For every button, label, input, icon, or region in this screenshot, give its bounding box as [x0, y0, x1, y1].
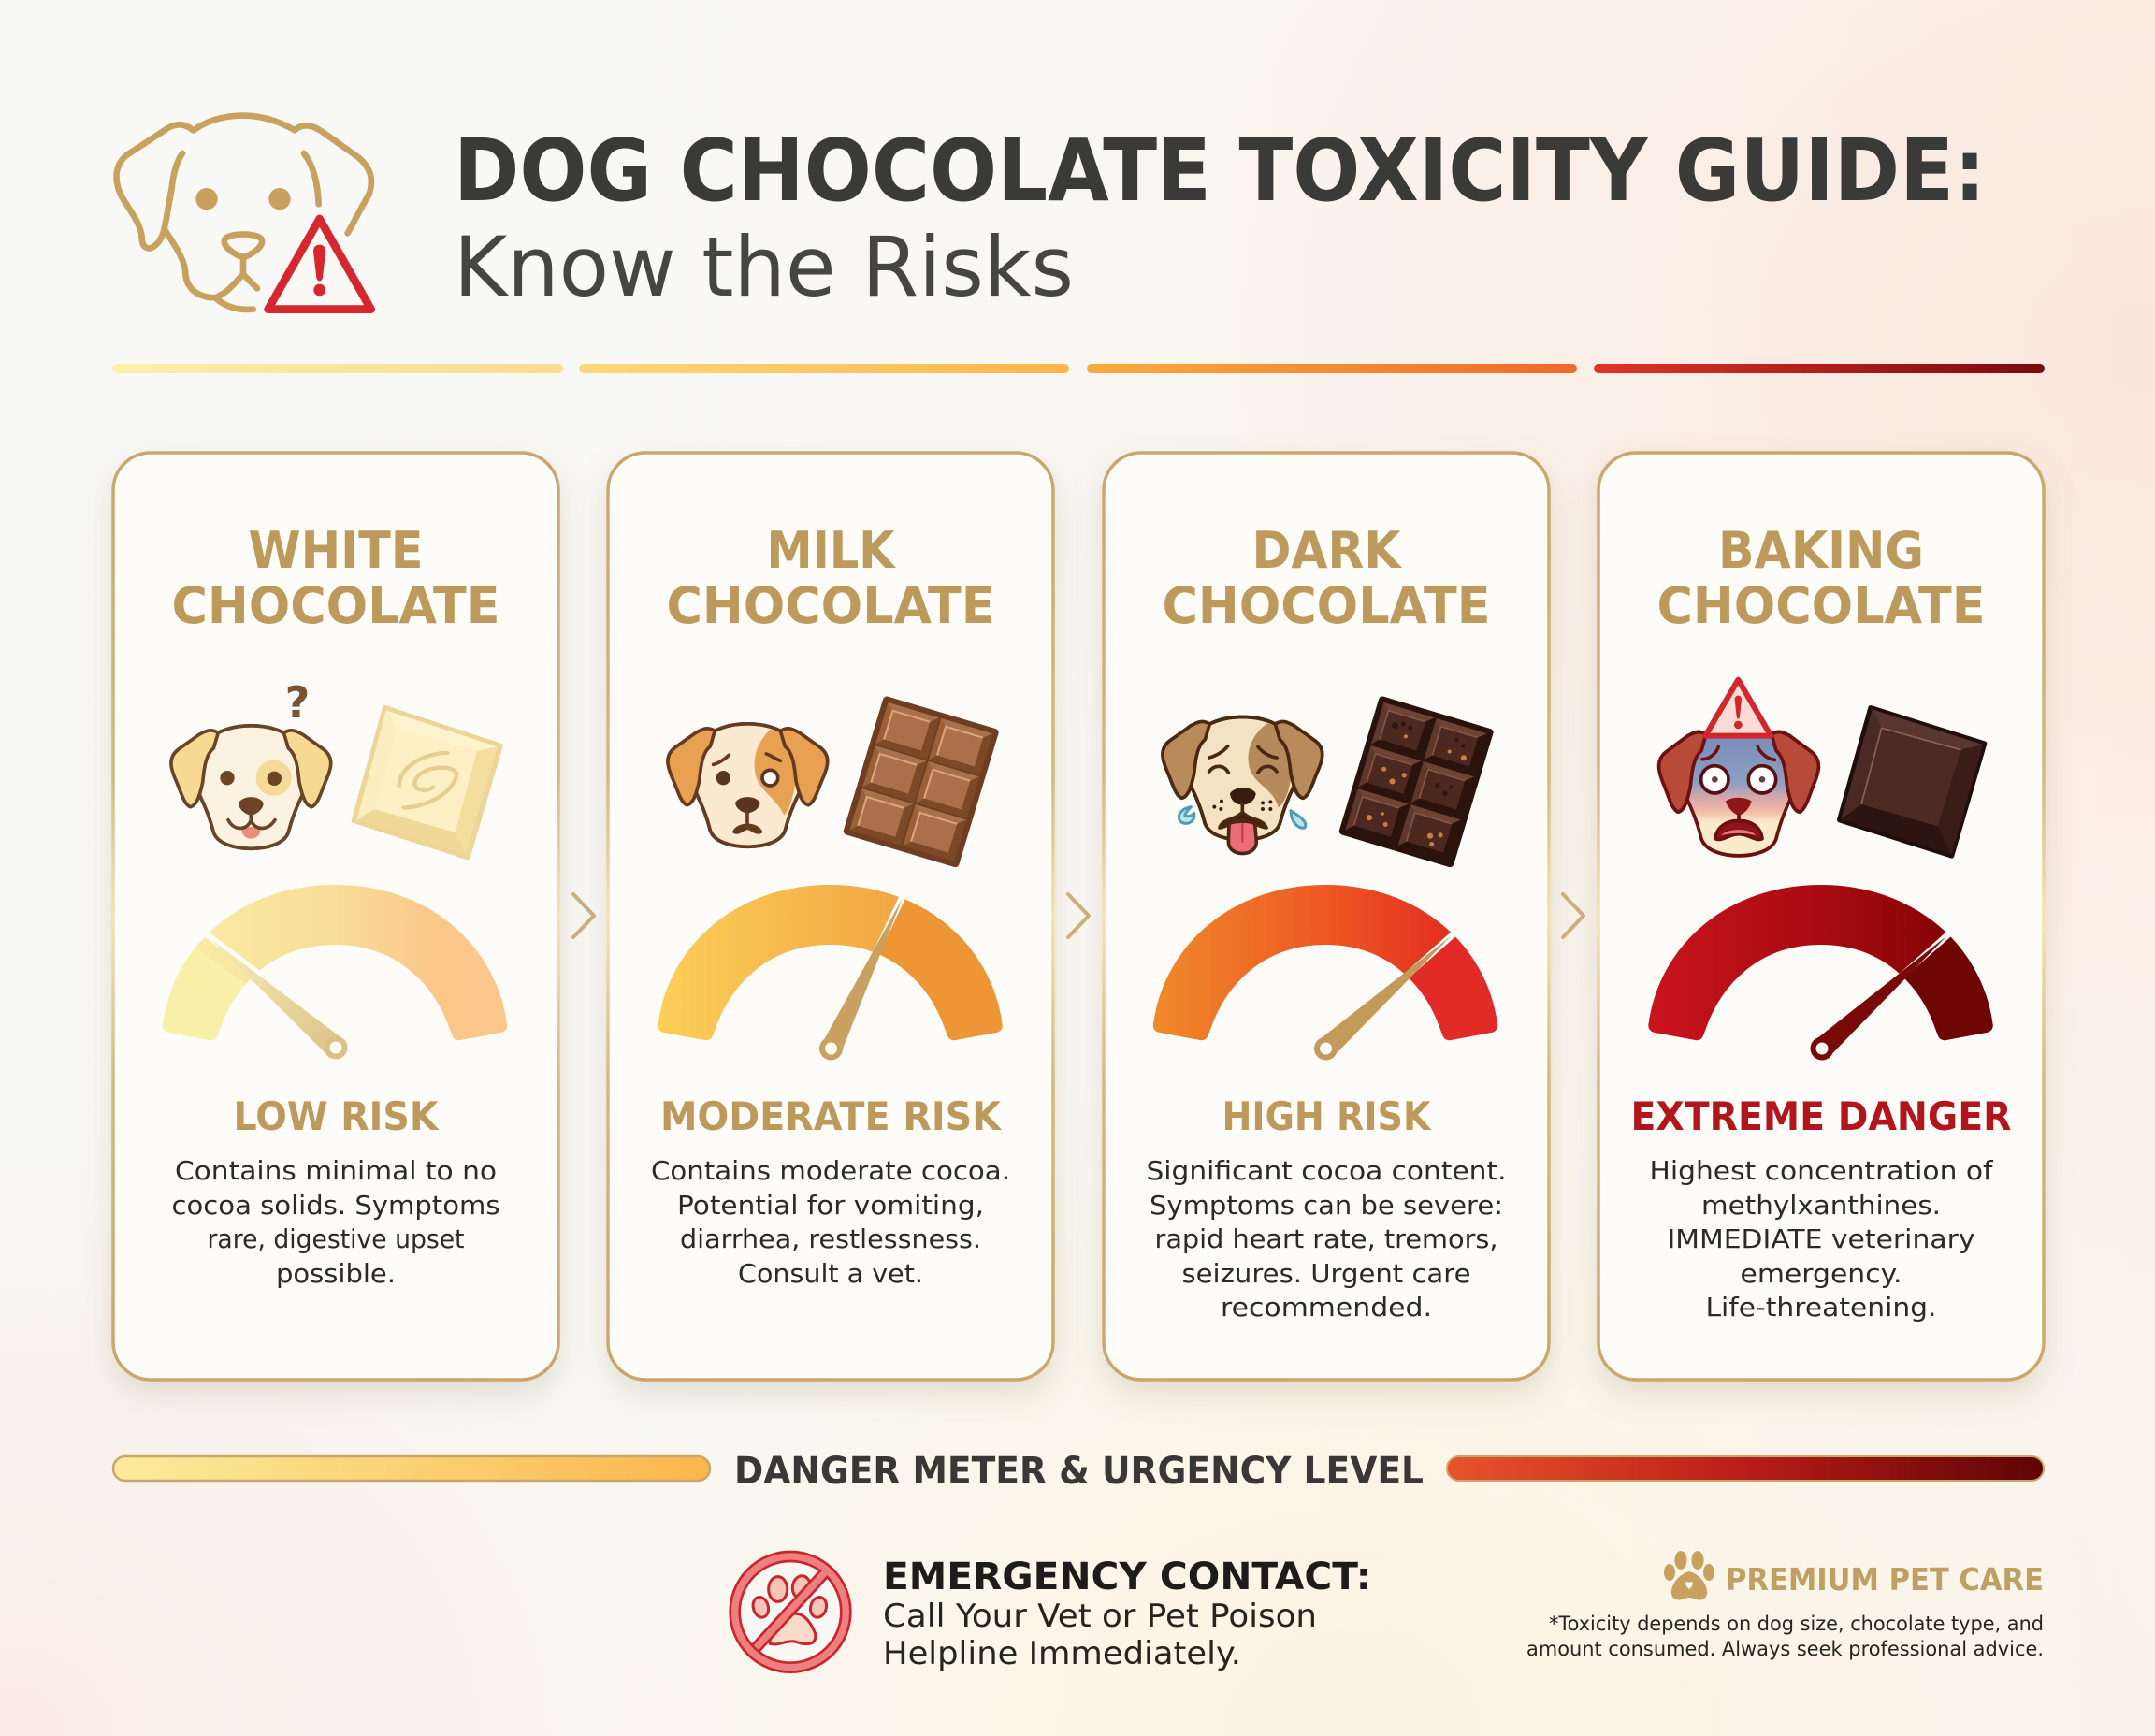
description: milk chocolate: [651, 1155, 1010, 1289]
heading: dark chocolate: [1162, 521, 1491, 635]
description: baking chocolate: IMMEDIATE veterinary: [1667, 1223, 1975, 1254]
icon: question mark: ?: [285, 677, 310, 728]
description: white chocolate: Contains minimal to no: [175, 1155, 497, 1186]
risk label: high: HIGH RISK: [1222, 1093, 1432, 1139]
brand name: PREMIUM PET CARE: [1726, 1561, 2044, 1598]
chevron 1: [573, 894, 594, 937]
description: baking chocolate: Highest concentration of: [1650, 1155, 1994, 1186]
heading: white chocolate: [172, 521, 499, 635]
header icon: dog with warning triangle: [117, 116, 371, 310]
icon: worried dog: [668, 724, 828, 846]
description: dark chocolate: recommended.: [1221, 1292, 1432, 1323]
description: white chocolate: rare, digestive upset: [208, 1223, 465, 1254]
risk label: extreme: EXTREME DANGER: [1631, 1093, 2011, 1139]
description: dark chocolate: rapid heart rate, tremors,: [1154, 1223, 1498, 1254]
description: white chocolate: cocoa solids. Symptoms: [172, 1190, 499, 1221]
description: white chocolate: [172, 1155, 499, 1289]
panel: white chocolate: [113, 453, 558, 1380]
description: milk chocolate: Consult a vet.: [738, 1258, 923, 1289]
heading: white chocolate: WHITE: [249, 521, 423, 580]
description: dark chocolate: seizures. Urgent care: [1182, 1258, 1470, 1289]
heading: dark chocolate: DARK: [1251, 521, 1403, 580]
title: [454, 121, 1986, 315]
icon: paw logo: [1664, 1551, 1714, 1600]
footnote: *Toxicity depends on dog size, chocolate type, and: [1549, 1613, 2044, 1635]
heading: white chocolate: CHOCOLATE: [172, 576, 499, 635]
emergency contact text: Helpline Immediately.: [883, 1635, 1241, 1672]
heading: baking chocolate: CHOCOLATE: [1657, 576, 1985, 635]
chevron 2: [1068, 894, 1089, 937]
icon: white chocolate square: [354, 708, 500, 858]
description: milk chocolate: Contains moderate cocoa.: [651, 1155, 1010, 1186]
title: DOG CHOCOLATE TOXICITY GUIDE:: [454, 121, 1986, 221]
description: milk chocolate: diarrhea, restlessness.: [680, 1223, 981, 1254]
icon: panting dog: [1163, 716, 1323, 853]
risk colour bars: [112, 364, 2045, 373]
description: baking chocolate: emergency.: [1740, 1258, 1902, 1289]
description: milk chocolate: Potential for vomiting,: [677, 1190, 984, 1221]
description: dark chocolate: Symptoms can be severe:: [1150, 1190, 1503, 1221]
gauge: low risk: [166, 889, 503, 1059]
heading: baking chocolate: [1657, 521, 1985, 635]
chevron 3: [1563, 894, 1584, 937]
footnote: [1526, 1613, 2044, 1660]
icon: baking chocolate square: [1840, 708, 1985, 856]
description: baking chocolate: methylxanthines.: [1701, 1190, 1941, 1221]
icon: warning triangle hat: [1705, 680, 1771, 736]
icon: no paw emergency: [735, 1556, 846, 1668]
description: dark chocolate: [1147, 1155, 1506, 1323]
heading: baking chocolate: BAKING: [1718, 521, 1924, 580]
gauge: extreme danger: [1652, 889, 1989, 1061]
panel: milk chocolate: [608, 453, 1053, 1380]
heading: milk chocolate: [666, 521, 995, 635]
icon: happy dog: [171, 726, 331, 848]
icon: dark chocolate bar: [1340, 698, 1492, 866]
description: baking chocolate: Life-threatening.: [1706, 1292, 1936, 1323]
emergency contact text: [883, 1555, 1371, 1672]
risk label: low: LOW RISK: [234, 1093, 440, 1139]
danger meter: [113, 1450, 2044, 1493]
panel: dark chocolate: [1104, 453, 1549, 1380]
description: baking chocolate: [1650, 1155, 1994, 1323]
gauge: high risk: [1157, 889, 1494, 1061]
heading: milk chocolate: CHOCOLATE: [666, 576, 995, 635]
icon: sweat drops: [1179, 807, 1306, 828]
gauge: moderate risk: [661, 886, 999, 1061]
icon: terrified dog: [1659, 727, 1818, 856]
risk label: moderate: MODERATE RISK: [660, 1093, 1002, 1139]
icon: milk chocolate bar: [845, 698, 997, 866]
description: dark chocolate: Significant cocoa content.: [1147, 1155, 1506, 1186]
description: white chocolate: possible.: [276, 1258, 396, 1289]
footnote: amount consumed. Always seek professional advice.: [1526, 1638, 2044, 1660]
title: Know the Risks: [454, 219, 1074, 315]
emergency contact text: EMERGENCY CONTACT:: [883, 1555, 1371, 1599]
danger meter label: DANGER METER & URGENCY LEVEL: [734, 1450, 1424, 1493]
heading: dark chocolate: CHOCOLATE: [1162, 576, 1491, 635]
emergency contact text: Call Your Vet or Pet Poison: [883, 1598, 1317, 1635]
heading: milk chocolate: MILK: [767, 521, 896, 580]
panel: baking chocolate: [1598, 453, 2044, 1380]
